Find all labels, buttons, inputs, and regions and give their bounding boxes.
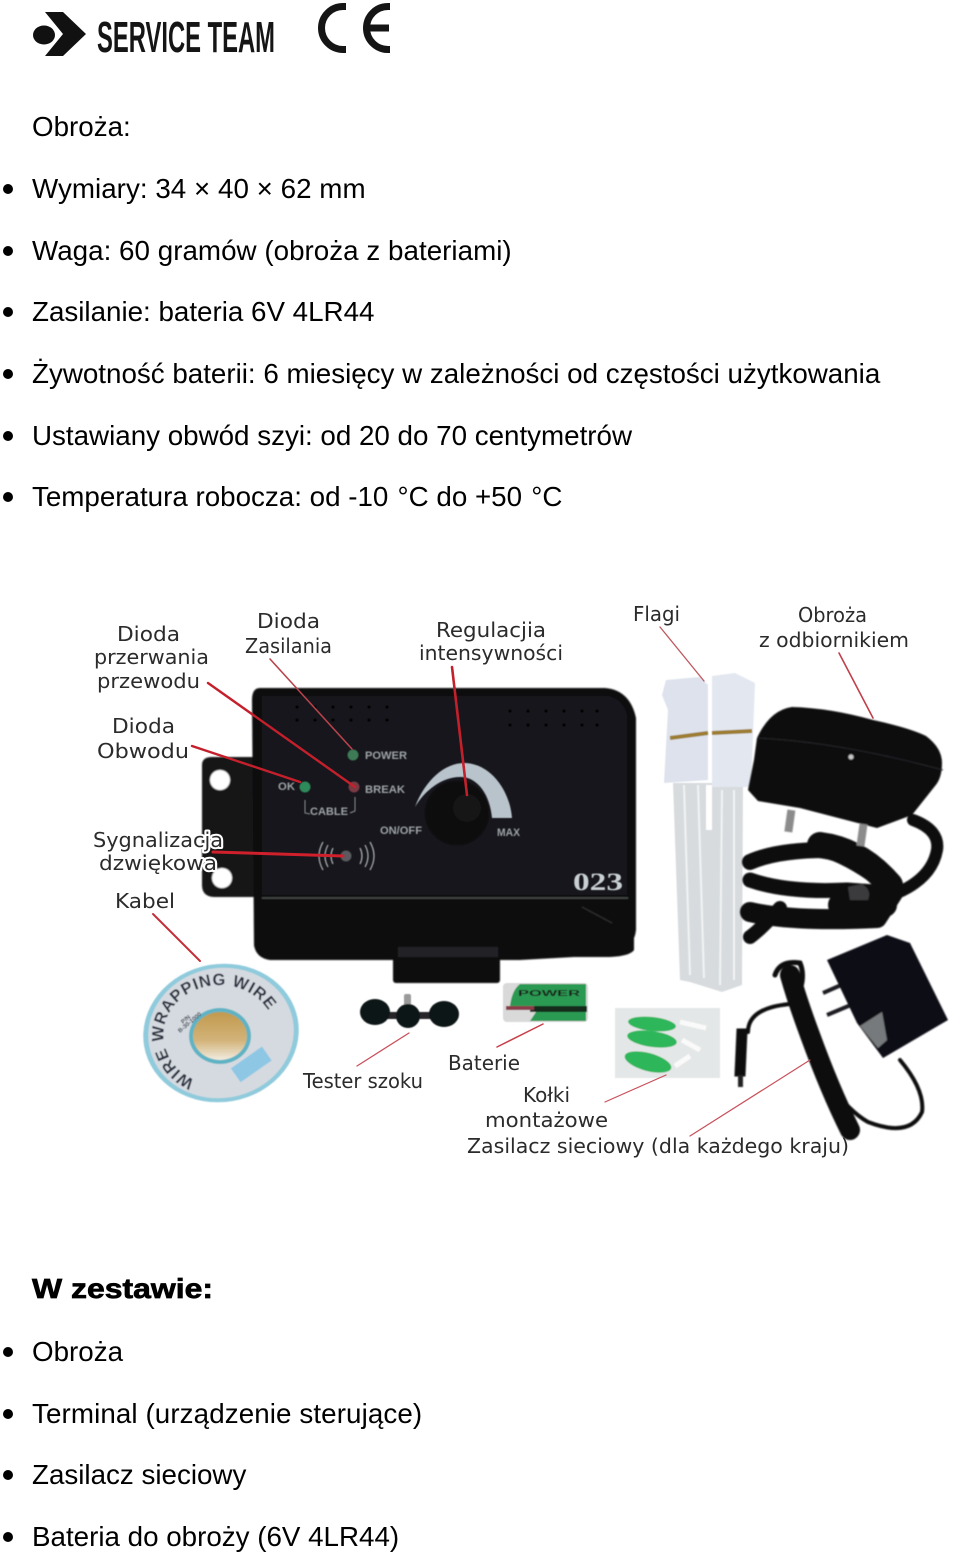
list item: power: Zasilanie: bateria 6V 4LR44 bbox=[32, 296, 374, 326]
battery bbox=[503, 983, 588, 1022]
red pointer lines bbox=[153, 627, 873, 1136]
photo labels: z odbiornikiem bbox=[759, 628, 909, 652]
panel LEDs and printed markings: CABLE bbox=[310, 806, 348, 818]
photo labels: Dioda bbox=[112, 714, 175, 738]
photo labels: Regulacjia bbox=[436, 618, 546, 642]
list item: collar: Obroża bbox=[32, 1336, 123, 1366]
photo labels: Baterie bbox=[448, 1051, 520, 1075]
panel LEDs and printed markings: OK bbox=[278, 781, 295, 793]
icon: Service Team logo mark bbox=[33, 12, 86, 56]
sound indicator bbox=[340, 850, 352, 862]
photo labels: Obwodu bbox=[97, 739, 189, 763]
collar with receiver bbox=[748, 707, 943, 937]
panel LEDs and printed markings: BREAK bbox=[365, 784, 405, 796]
intensity dial bbox=[415, 763, 512, 818]
list item: terminal: Terminal (urządzenie sterujące) bbox=[32, 1398, 422, 1428]
list item: collar battery: Bateria do obroży (6V 4LR44) bbox=[32, 1520, 399, 1552]
photo labels: intensywności bbox=[419, 641, 563, 665]
list item: neck size: Ustawiany obwód szyi: od 20 do 70 centymetrów bbox=[32, 420, 632, 450]
logo: Service Team and CE mark bbox=[33, 3, 390, 60]
package contents list bbox=[3, 1336, 422, 1552]
photo labels: Dioda bbox=[257, 609, 320, 633]
flags bundle bbox=[662, 673, 755, 992]
power adapter bbox=[736, 935, 948, 1130]
terminal control unit bbox=[202, 688, 636, 983]
photo labels: Zasilacz sieciowy (dla każdego kraju) bbox=[467, 1134, 849, 1158]
list item: battery life: Żywotność baterii: 6 miesięcy w zależności od częstości użytkowania bbox=[32, 358, 880, 388]
shock tester bbox=[360, 994, 459, 1028]
list item: weight: Waga: 60 gramów (obroża z bateriami) bbox=[32, 234, 512, 266]
wire spool: B-30-1000 bbox=[177, 1011, 204, 1035]
vent dots bbox=[295, 705, 599, 727]
photo labels: Tester szoku bbox=[302, 1069, 423, 1093]
battery: POWER bbox=[518, 989, 580, 998]
heading: W zestawie: W zestawie: bbox=[32, 1273, 213, 1304]
photo labels: przewodu bbox=[97, 669, 200, 693]
photo labels: Sygnalizacja bbox=[93, 828, 223, 852]
photo labels: Kołki bbox=[523, 1083, 570, 1107]
red pointer: sound signal bbox=[213, 852, 343, 856]
heading: Obroża: Obroża: bbox=[32, 111, 131, 142]
specification list bbox=[3, 172, 880, 512]
list item: power adapter: Zasilacz sieciowy bbox=[32, 1458, 246, 1490]
photo labels: Kabel bbox=[115, 889, 175, 913]
photo labels: dzwiękowa bbox=[99, 851, 217, 875]
photo labels: Zasilania bbox=[245, 634, 332, 658]
panel LEDs and printed markings: POWER bbox=[365, 750, 407, 762]
panel LEDs and printed markings bbox=[278, 750, 623, 896]
wire spool: WIRE WRAPPING WIRE bbox=[151, 973, 278, 1090]
photo labels bbox=[93, 602, 909, 1158]
photo labels: montażowe bbox=[485, 1108, 608, 1132]
photo labels: przerwania bbox=[94, 645, 209, 669]
wire spool: P/N bbox=[180, 1014, 192, 1026]
panel LEDs and printed markings: ON/OFF bbox=[380, 825, 422, 837]
photo labels: Obroża bbox=[798, 603, 867, 627]
photo labels: Flagi bbox=[633, 602, 680, 626]
photo labels: Dioda bbox=[117, 622, 180, 646]
list item: dimensions: Wymiary: 34 × 40 × 62 mm bbox=[32, 172, 366, 204]
icon: CE mark bbox=[322, 6, 390, 50]
model number: 023 bbox=[573, 869, 623, 896]
mounting pins bag bbox=[615, 1008, 720, 1078]
list item: temperature: Temperatura robocza: od -10 °C do +50 °C bbox=[32, 480, 562, 512]
panel LEDs and printed markings: MAX bbox=[497, 827, 521, 839]
